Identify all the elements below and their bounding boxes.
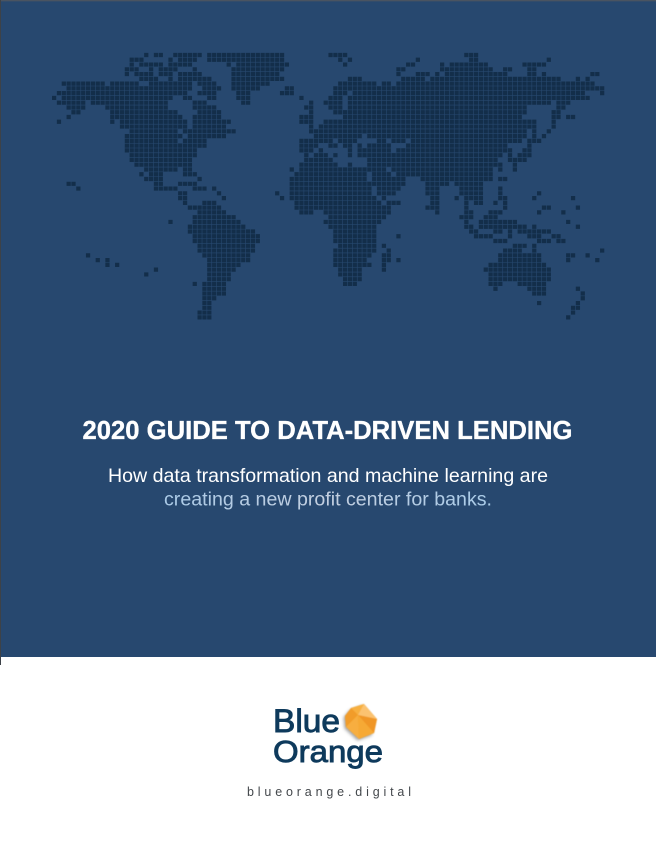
logo wordmark: Orange (273, 734, 383, 769)
logo: Blue Orange (273, 703, 383, 769)
logo wordmark (273, 703, 383, 769)
panel: blue cover background (0, 0, 656, 665)
website url: blueorange.digital (247, 785, 411, 799)
title: 2020 GUIDE TO DATA-DRIVEN LENDING (82, 415, 572, 445)
icon: orange polyhedron (344, 704, 377, 740)
panel: white footer (1, 657, 656, 847)
subtitle (108, 465, 548, 510)
subtitle: How data transformation and machine learning are (108, 465, 548, 487)
subtitle: creating a new profit center for banks. (164, 490, 492, 510)
logo wordmark: Blue (273, 703, 340, 739)
chart: dotted world map (52, 55, 605, 317)
